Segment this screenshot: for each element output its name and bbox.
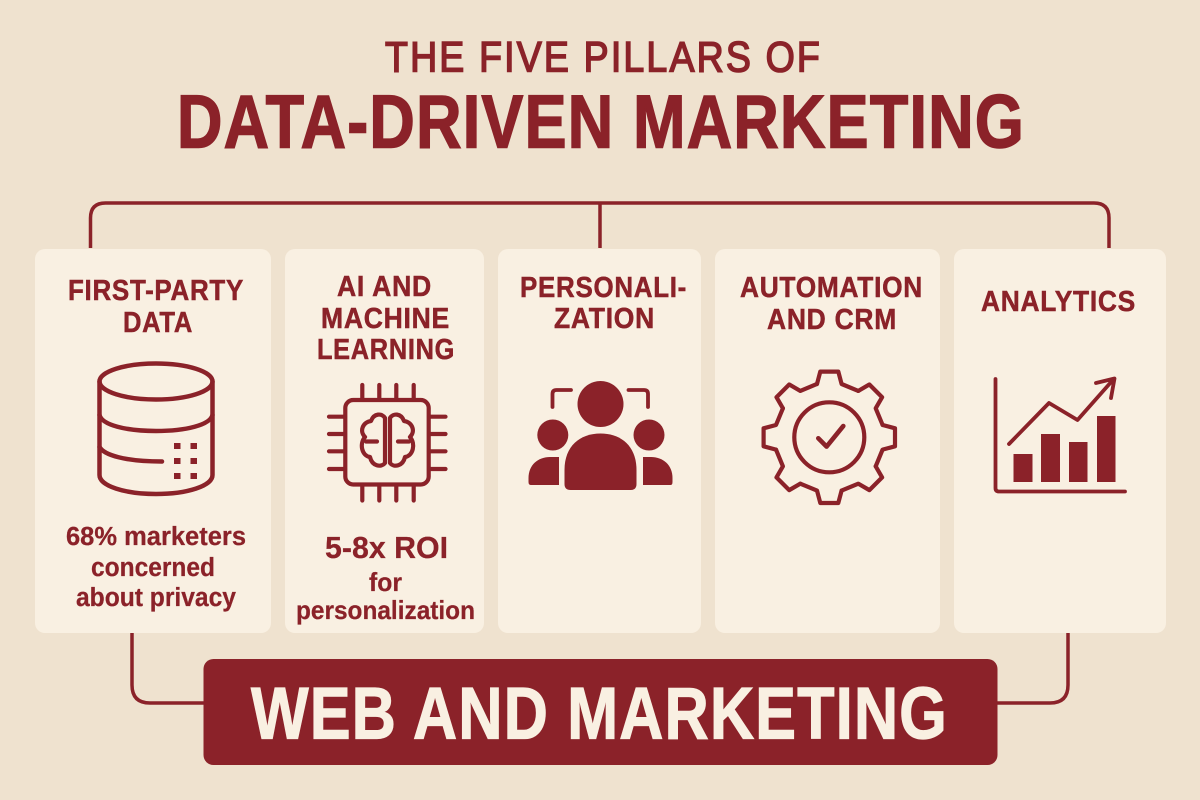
- icon: database: [100, 364, 212, 494]
- banner: web and marketing: [204, 659, 998, 765]
- heading: automation and crm: AND CRM: [767, 304, 897, 336]
- heading: ai and machine learning: [317, 271, 455, 366]
- heading: first-party data: DATA: [123, 307, 193, 339]
- stat: 5-8x roi for personalization: [296, 530, 475, 625]
- stat: 5-8x roi for personalization: personalization: [296, 595, 475, 625]
- heading: automation and crm: [740, 272, 923, 336]
- panel: first-party data: [35, 249, 271, 633]
- heading: first-party data: [68, 275, 244, 339]
- top connector bracket: [90, 203, 1109, 248]
- heading: ai and machine learning: AI AND: [337, 271, 432, 303]
- icon: people group: [528, 381, 672, 490]
- heading: personalization: ZATION: [554, 303, 655, 335]
- heading: first-party data: FIRST-PARTY: [68, 275, 244, 307]
- heading: personalization: PERSONALI-: [520, 272, 687, 304]
- stat: 68% marketers concerned about privacy: about privacy: [76, 584, 237, 612]
- bottom connector lines: [132, 633, 1068, 703]
- panel: personalization: [498, 249, 701, 633]
- panel: automation and crm: [715, 249, 940, 633]
- stat: 68% marketers concerned about privacy: 68% marketers: [66, 523, 246, 551]
- title line 2: DATA-DRIVEN MARKETING: [177, 80, 1025, 164]
- stat: 68% marketers concerned about privacy: concerned: [91, 554, 215, 582]
- banner: web and marketing: WEB AND MARKETING: [251, 674, 948, 754]
- panel: ai and machine learning: [285, 249, 484, 633]
- title: [177, 34, 1025, 164]
- heading: analytics: ANALYTICS: [981, 286, 1136, 318]
- title line 1: THE FIVE PILLARS OF: [385, 34, 822, 82]
- stat: 5-8x roi for personalization: 5-8x ROI: [325, 530, 448, 565]
- heading: personalization: [520, 272, 687, 335]
- panel: analytics: [954, 249, 1166, 633]
- stat: 68% marketers concerned about privacy: [66, 523, 246, 612]
- icon: gear with check: [762, 370, 896, 504]
- heading: automation and crm: AUTOMATION: [740, 272, 923, 304]
- icon: bar chart with arrow: [996, 378, 1125, 492]
- heading: ai and machine learning: MACHINE: [321, 303, 450, 335]
- heading: ai and machine learning: LEARNING: [317, 334, 455, 366]
- icon: brain chip: [329, 385, 446, 500]
- stat: 5-8x roi for personalization: for: [369, 567, 402, 597]
